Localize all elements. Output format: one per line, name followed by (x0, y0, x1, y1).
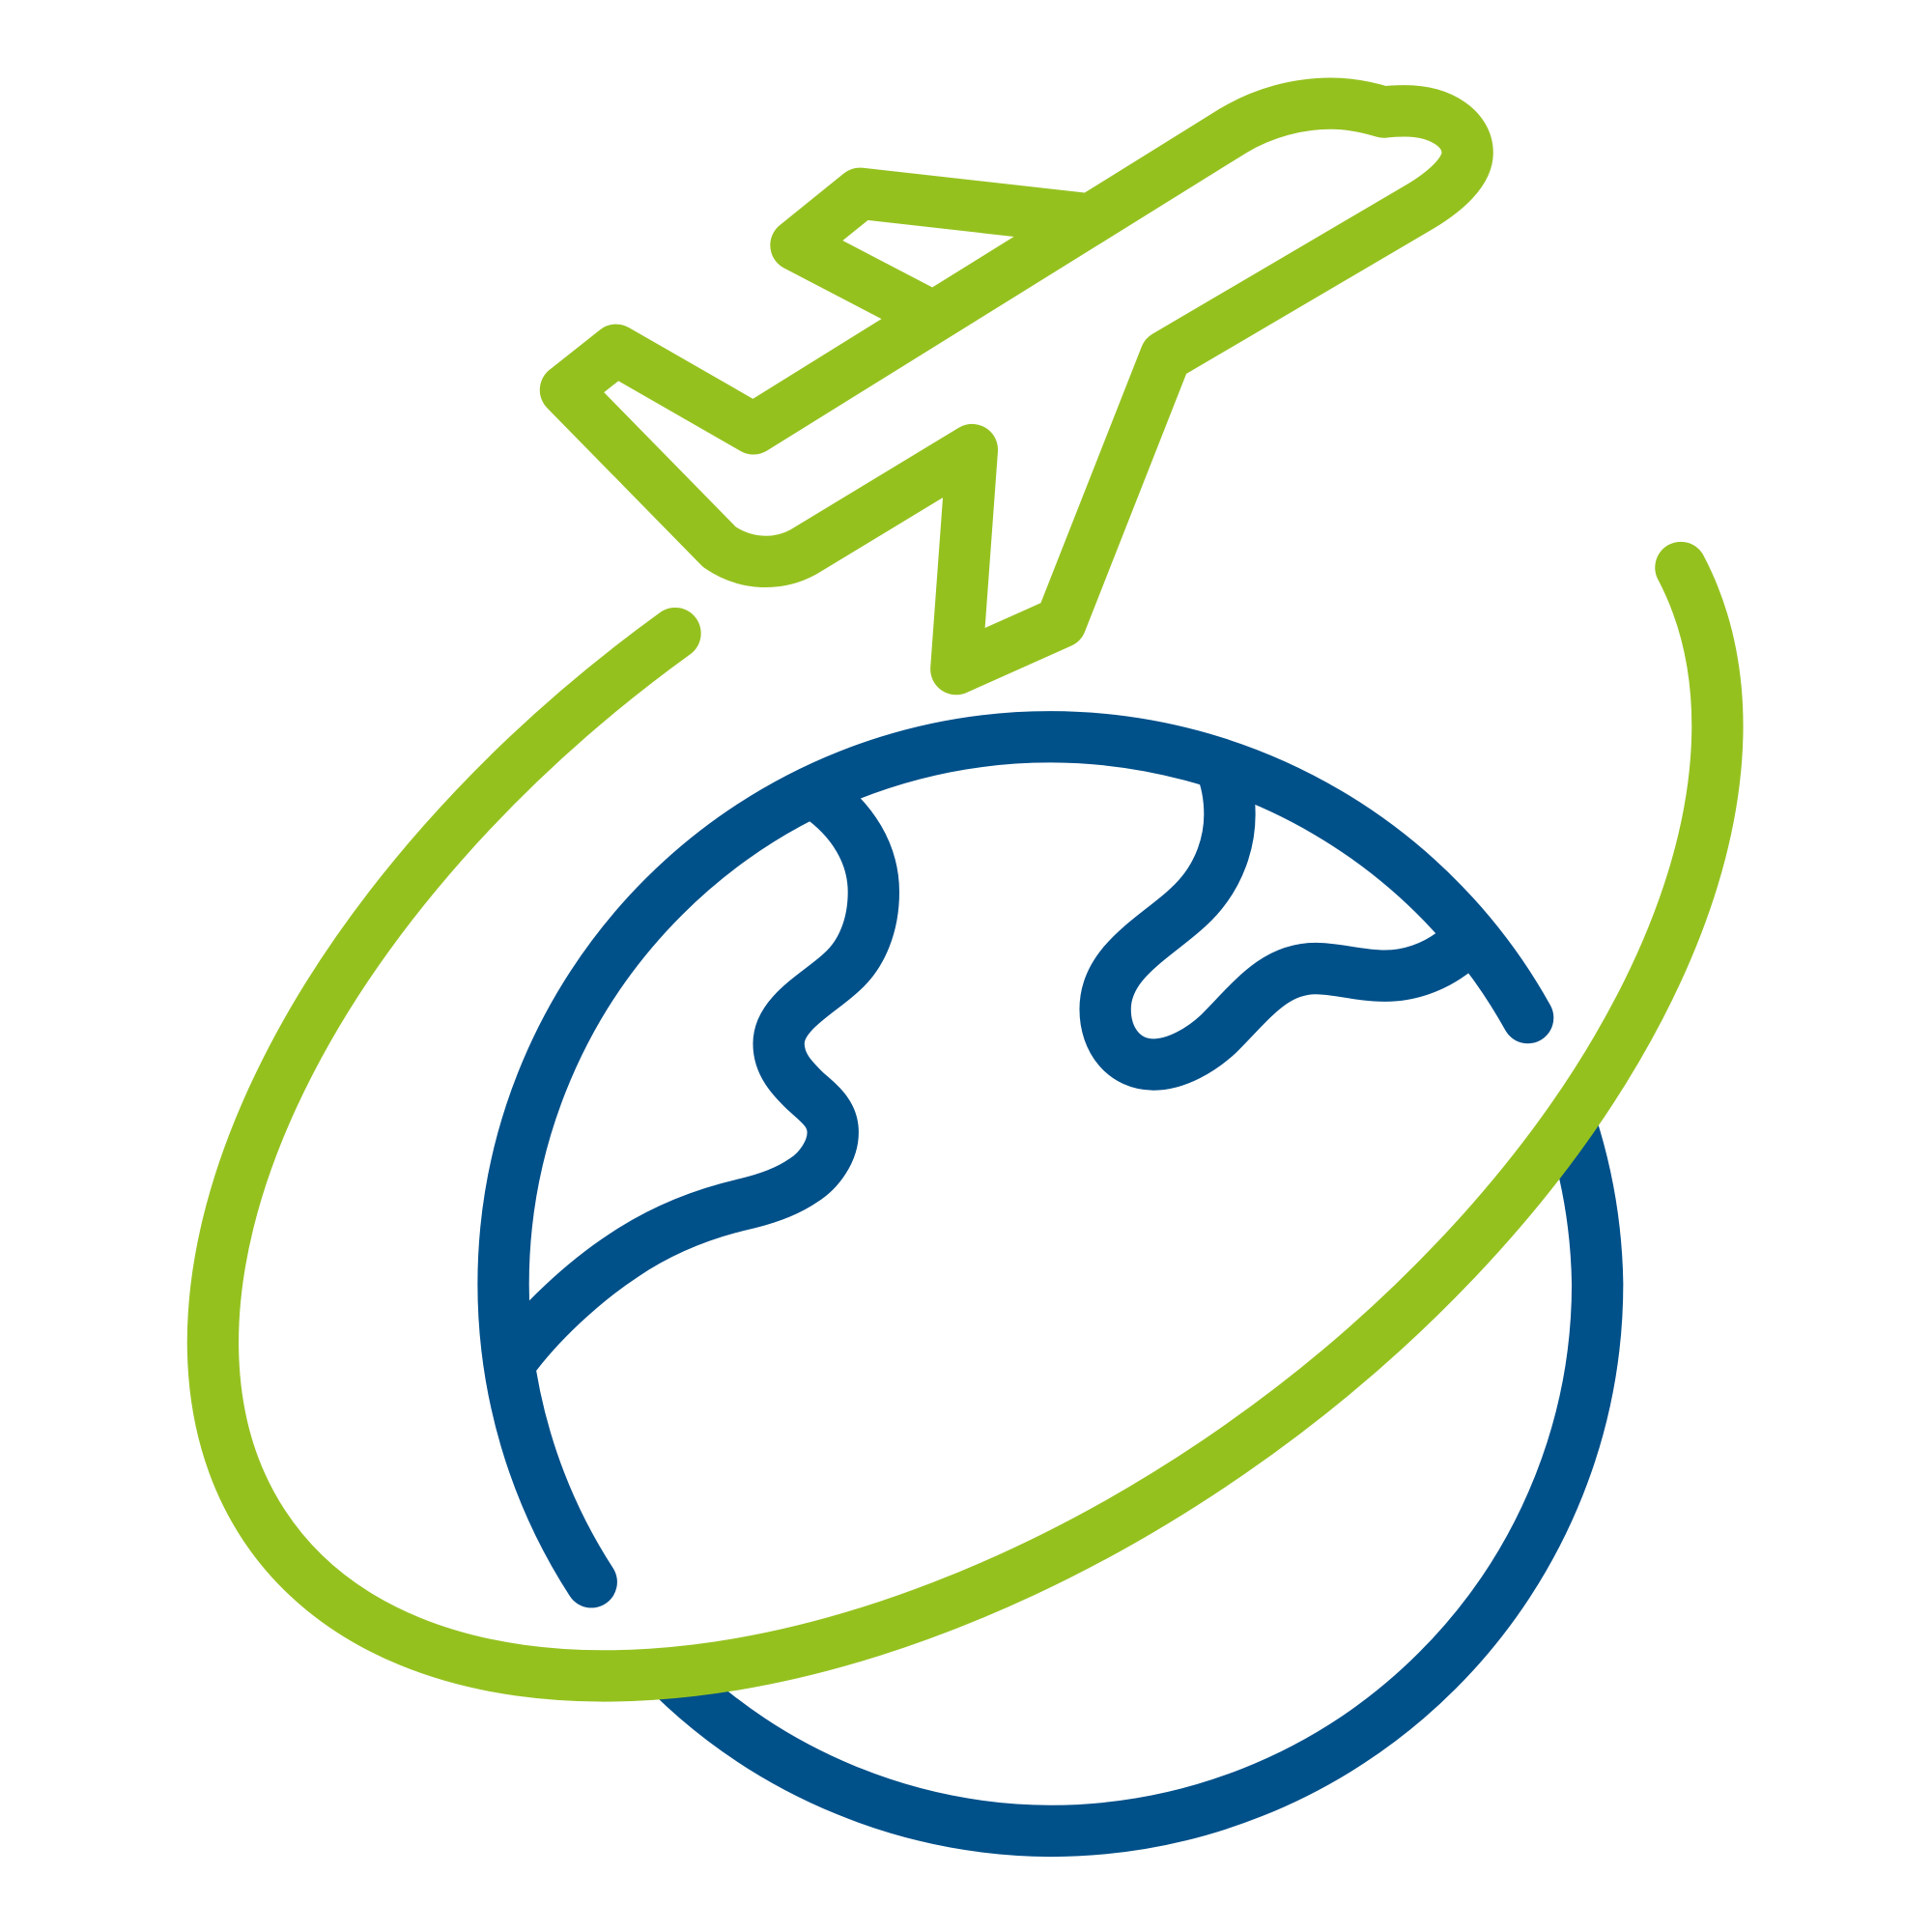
airplane tail fin (796, 193, 1091, 317)
globe outline: lower arc (671, 1123, 1598, 1831)
continent: right landmass (1105, 764, 1468, 1065)
globe outline: upper arc (503, 737, 1528, 1582)
airplane body and wings (565, 103, 1467, 669)
orbit swoosh (213, 568, 1718, 1676)
globe (503, 737, 1598, 1831)
airplane (565, 103, 1467, 669)
continent: left landmass (510, 795, 873, 1363)
